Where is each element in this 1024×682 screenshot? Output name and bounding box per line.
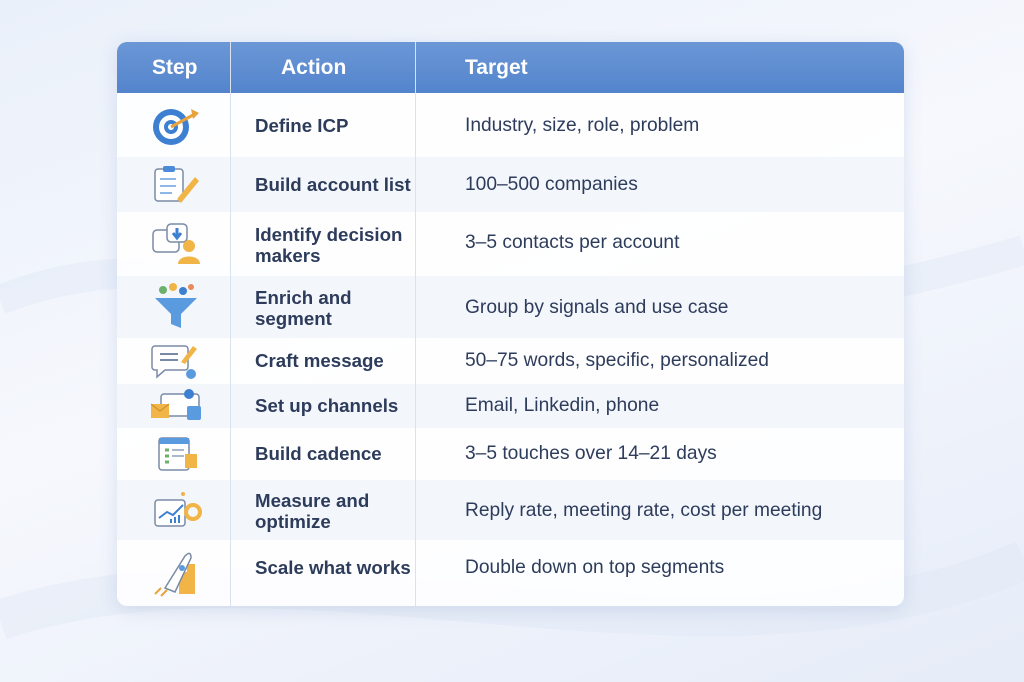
row 4: Group by signals and use case (465, 297, 728, 318)
row 7: 3–5 touches over 14–21 days (465, 443, 717, 464)
row 2: Build account list (255, 174, 411, 195)
row 3: Identify decision (255, 224, 402, 245)
row 2: 100–500 companies (465, 174, 638, 195)
row 5: Craft message (255, 350, 384, 371)
row 1 (153, 109, 699, 145)
row 1: Define ICP (255, 115, 348, 136)
row 3: makers (255, 245, 320, 266)
icon: channels (151, 389, 201, 420)
header row: Step (152, 56, 198, 79)
row 8: optimize (255, 511, 331, 532)
row 7 (158, 437, 717, 471)
row 4 (117, 276, 904, 338)
row 2 (117, 157, 904, 212)
icon: target (153, 109, 199, 145)
icon: chart gear (154, 492, 202, 527)
icon: funnel (155, 283, 197, 328)
icon: decision makers (152, 223, 200, 264)
row 3 (152, 223, 680, 266)
divider lines (230, 42, 231, 606)
row 5: 50–75 words, specific, personalized (465, 350, 769, 371)
header row (117, 42, 904, 93)
row 3: 3–5 contacts per account (465, 232, 679, 253)
row 6: Email, Linkedin, phone (465, 395, 659, 416)
row 8: Reply rate, meeting rate, cost per meeting (465, 500, 822, 521)
row 8: Measure and (255, 490, 369, 511)
row 1: Industry, size, role, problem (465, 115, 699, 136)
icon: clipboard (154, 166, 199, 203)
row 9 (154, 552, 724, 597)
icon: rocket (154, 552, 195, 597)
row 6 (117, 384, 904, 428)
row 4: segment (255, 308, 332, 329)
row 5 (151, 345, 769, 379)
row 9: Scale what works (255, 557, 411, 578)
row 9: Double down on top segments (465, 557, 724, 578)
row 6: Set up channels (255, 395, 398, 416)
header row: Target (465, 56, 528, 79)
row 7: Build cadence (255, 443, 382, 464)
icon: cadence (158, 437, 197, 471)
row 4: Enrich and (255, 287, 352, 308)
row 8 (117, 480, 904, 540)
icon: message (151, 345, 197, 379)
table (117, 42, 904, 606)
header row: Action (281, 56, 346, 79)
